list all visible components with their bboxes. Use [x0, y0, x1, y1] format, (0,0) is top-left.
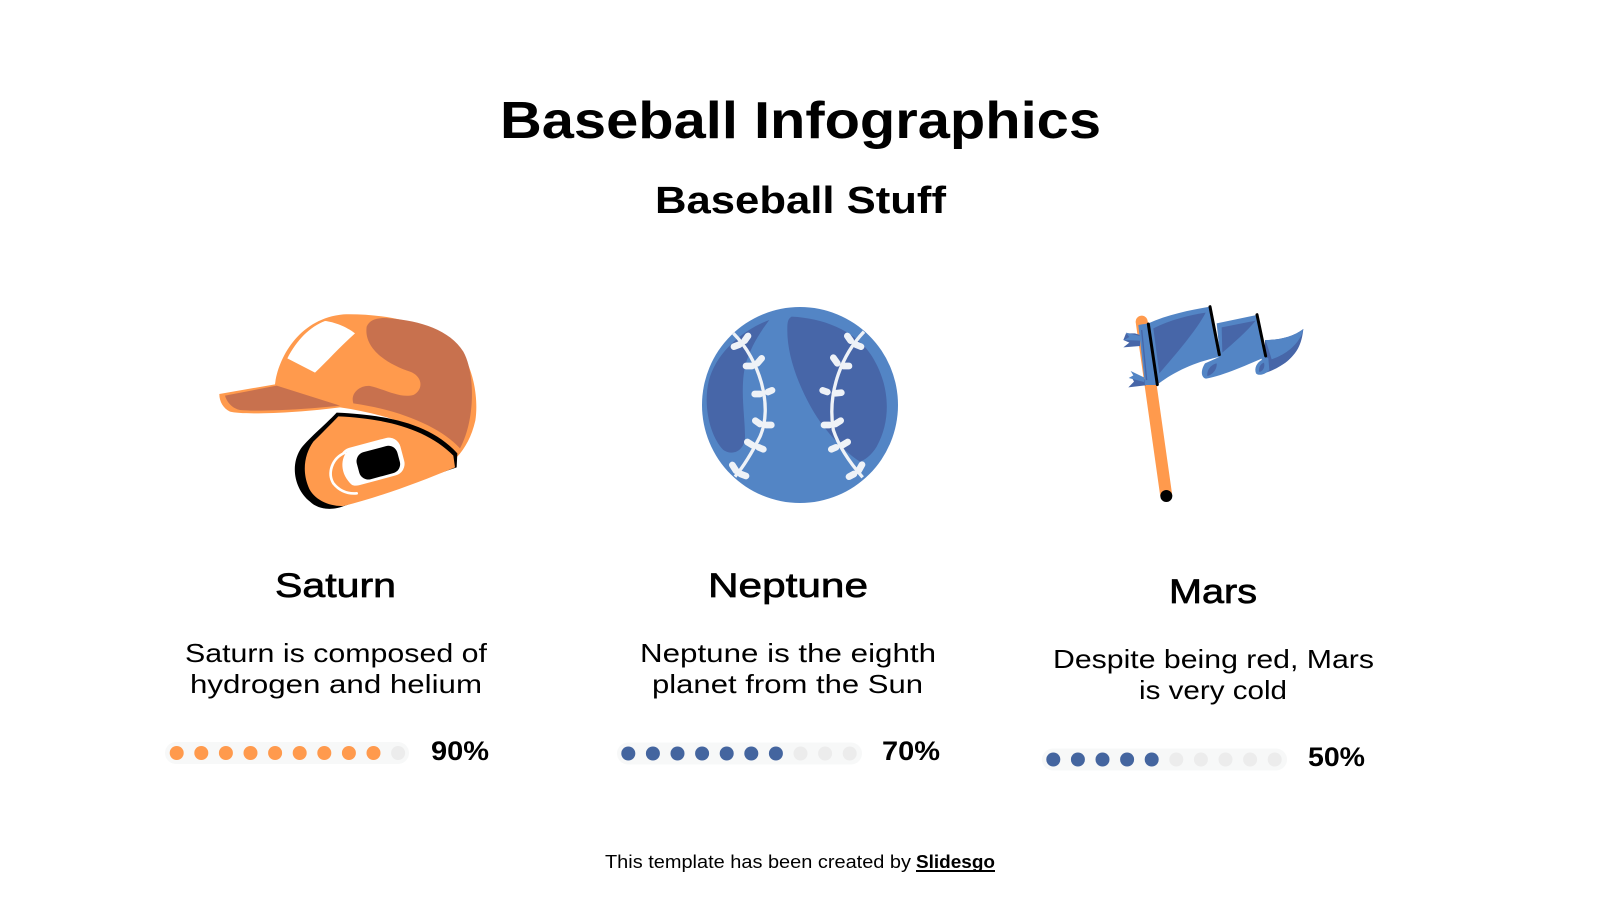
heading: Saturn: Saturn	[275, 567, 396, 605]
heading: Mars: Mars	[1169, 573, 1257, 611]
text: Neptune description: planet from the Sun	[652, 669, 923, 699]
heading: Neptune: Neptune	[708, 567, 868, 605]
progress dots: 70%	[617, 742, 862, 764]
value: 90%: 90%	[431, 736, 489, 766]
text: Neptune description: Neptune is the eighth	[640, 638, 936, 668]
text: Mars description: Despite being red, Mars	[1053, 644, 1374, 674]
icon: pennant flag	[1123, 307, 1303, 502]
value: 70%: 70%	[882, 736, 940, 766]
value: 50%: 50%	[1308, 742, 1365, 772]
progress dots: 90%	[165, 742, 409, 764]
title: Baseball Infographics	[500, 92, 1101, 150]
text: Saturn description: hydrogen and helium	[190, 669, 482, 699]
text: Mars description: is very cold	[1139, 675, 1287, 705]
subtitle: Baseball Stuff	[655, 180, 946, 222]
panel: Saturn	[165, 567, 489, 766]
panel: Neptune	[617, 567, 940, 766]
icon: baseball	[702, 307, 898, 503]
text: Saturn description: Saturn is composed of	[185, 638, 488, 668]
footer credit: Slidesgo	[916, 852, 995, 872]
text: Saturn description	[185, 638, 488, 699]
footer credit: This template has been created by	[605, 852, 911, 872]
icon: batting helmet	[219, 314, 476, 509]
panel: Mars	[1042, 573, 1374, 772]
text: Mars description	[1053, 644, 1374, 705]
text: Neptune description	[640, 638, 936, 699]
progress dots: 50%	[1042, 748, 1287, 770]
